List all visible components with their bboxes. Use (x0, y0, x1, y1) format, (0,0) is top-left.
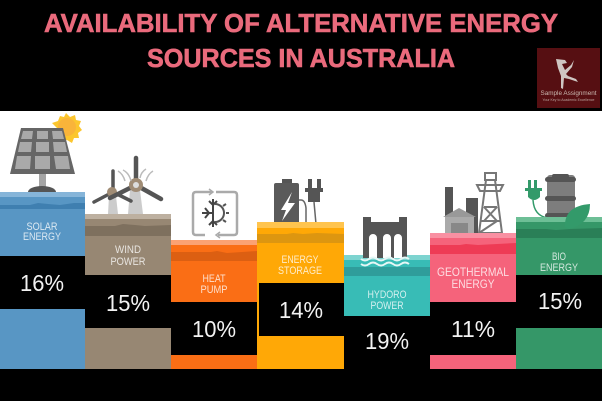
icon: barrel and plug (525, 174, 576, 218)
panel: solar energy: SOLAR (26, 221, 58, 233)
panel: heat pump: 10% (192, 316, 236, 342)
icon: water waves (361, 258, 409, 266)
icon: dam (363, 217, 407, 258)
panel: hydro power: POWER (370, 300, 404, 312)
panel: bio energy (516, 174, 602, 369)
panel: geothermal energy: GEOTHERMAL (437, 265, 509, 279)
panel: energy storage: 14% (279, 297, 323, 323)
panel: geothermal energy (430, 173, 516, 369)
logo: Sample Assignment (537, 48, 600, 108)
icon: solar panel (10, 128, 75, 192)
panel: solar energy: 16% (20, 270, 64, 296)
panel: hydro power: HYDORO (368, 289, 407, 301)
panel: energy storage (257, 179, 344, 369)
icon: leaf (565, 204, 590, 229)
panel: geothermal energy: 11% (451, 316, 495, 342)
panel: wind power (85, 158, 171, 369)
panel: wind power: 15% (106, 290, 150, 316)
panel: wind power: POWER (110, 256, 146, 268)
title: AVAILABILITY OF ALTERNATIVE ENERGY (44, 8, 558, 38)
panel: energy storage: ENERGY (282, 254, 319, 266)
panel: energy storage: STORAGE (278, 265, 322, 277)
panel: bio energy: 15% (538, 288, 582, 314)
logo: Sample Assignment: Sample Assignment (540, 90, 597, 97)
panel: hydro power (344, 217, 430, 369)
icon: power plant and pylon (443, 173, 503, 233)
icon: sun (52, 113, 82, 143)
panel: solar energy (0, 113, 85, 369)
title: SOURCES IN AUSTRALIA (147, 43, 455, 73)
panel: bio energy: BIO (552, 251, 566, 263)
panel: solar energy: ENERGY (23, 231, 62, 243)
panel: wind power: WIND (115, 244, 141, 256)
panel: heat pump: PUMP (200, 284, 228, 296)
panel: geothermal energy: ENERGY (452, 277, 494, 291)
panel: hydro power: 19% (365, 328, 409, 354)
panel: heat pump (171, 189, 258, 369)
icon: battery and plug (274, 179, 323, 231)
title (44, 8, 558, 73)
panel: heat pump: HEAT (202, 273, 226, 285)
icon: wind turbines (94, 158, 161, 214)
panel: bio energy: ENERGY (540, 262, 579, 274)
icon: heat pump (193, 189, 237, 238)
illustration background (0, 111, 602, 369)
logo: Sample Assignment: Your Key to Academic Excellence (542, 98, 595, 102)
